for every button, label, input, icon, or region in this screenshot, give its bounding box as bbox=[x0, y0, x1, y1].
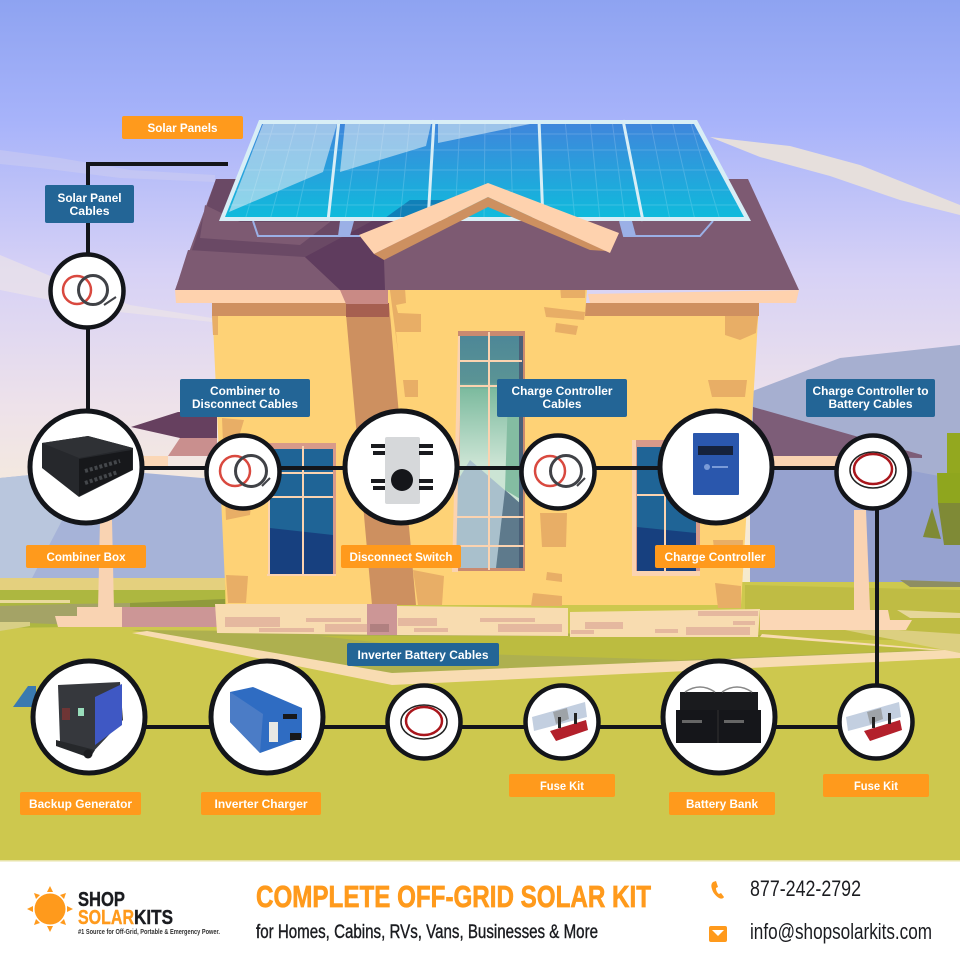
label: Battery Bank bbox=[669, 792, 775, 815]
label: Fuse Kit (right) bbox=[823, 774, 929, 797]
label: Combiner to Disconnect Cables: Disconnect Cables bbox=[192, 399, 298, 411]
right porch bbox=[753, 407, 922, 630]
label: Inverter Battery Cables: Inverter Battery Cables bbox=[358, 650, 488, 662]
phone number: 877-242-2792 bbox=[750, 876, 861, 901]
circle: fuse kit bbox=[526, 686, 598, 758]
left window bbox=[267, 443, 336, 576]
circle: battery bank bbox=[663, 661, 775, 773]
logo: Shop Solar Kits: SOLAR bbox=[78, 907, 134, 929]
circle: backup generator bbox=[33, 661, 145, 773]
label: Charge Controller to Battery Cables: Battery Cables bbox=[828, 399, 912, 411]
label: Charge Controller to Battery Cables: Charge Controller to bbox=[812, 386, 928, 398]
label: Combiner Box bbox=[26, 545, 146, 568]
tall centre window bbox=[452, 331, 525, 572]
circle: charge controller bbox=[660, 411, 772, 523]
connector lines bbox=[88, 164, 877, 727]
label: Disconnect Switch: Disconnect Switch bbox=[350, 552, 452, 564]
circle: inverter battery cables bbox=[388, 686, 460, 758]
label: Inverter Charger bbox=[201, 792, 321, 815]
label: Charge Controller Cables bbox=[497, 379, 627, 417]
label: Combiner to Disconnect Cables bbox=[180, 379, 310, 417]
label: Fuse Kit (right): Fuse Kit bbox=[854, 781, 898, 793]
label: Solar Panel Cables: Solar Panel bbox=[58, 193, 122, 205]
icon: email bbox=[709, 926, 727, 942]
house bbox=[55, 120, 922, 637]
foundation bbox=[215, 604, 760, 637]
label: Battery Bank: Battery Bank bbox=[686, 799, 759, 811]
label: Fuse Kit bbox=[509, 774, 615, 797]
label: Charge Controller bbox=[655, 545, 775, 568]
footer title: COMPLETE OFF-GRID SOLAR KIT bbox=[256, 879, 651, 914]
label: Inverter Battery Cables bbox=[347, 643, 499, 666]
logo: Shop Solar Kits bbox=[27, 886, 220, 936]
circle: inverter charger bbox=[211, 661, 323, 773]
gable bbox=[359, 183, 619, 260]
label: Solar Panel Cables: Cables bbox=[70, 206, 110, 218]
label: Backup Generator: Backup Generator bbox=[29, 799, 133, 811]
right window bbox=[632, 440, 700, 576]
icon: phone bbox=[711, 881, 724, 899]
label: Charge Controller Cables: Cables bbox=[542, 399, 582, 411]
label: Solar Panel Cables bbox=[45, 185, 134, 223]
circle: charge controller cables bbox=[522, 436, 594, 508]
circle: solar panel cables bbox=[50, 254, 124, 328]
circle: disconnect switch bbox=[345, 411, 457, 523]
roof bbox=[175, 179, 799, 304]
label: Solar Panels bbox=[122, 116, 243, 139]
label: Fuse Kit: Fuse Kit bbox=[540, 781, 584, 793]
logo: Shop Solar Kits: #1 Source for Off-Grid, Portable & Emergency Power. bbox=[78, 927, 220, 936]
label: Charge Controller to Battery Cables bbox=[806, 379, 935, 417]
circle: combiner box bbox=[30, 411, 142, 523]
logo: Shop Solar Kits: KITS bbox=[134, 907, 173, 929]
label: Backup Generator bbox=[20, 792, 141, 815]
solar panel array bbox=[219, 120, 751, 236]
label: Inverter Charger: Inverter Charger bbox=[214, 799, 308, 811]
label: Solar Panels: Solar Panels bbox=[148, 123, 218, 135]
left porch bbox=[55, 412, 217, 627]
label: Disconnect Switch bbox=[341, 545, 461, 568]
circle: charge controller to battery cables bbox=[836, 436, 910, 508]
footer band bbox=[0, 860, 960, 960]
label: Charge Controller Cables: Charge Controller bbox=[512, 386, 613, 398]
label: Combiner to Disconnect Cables: Combiner to bbox=[210, 386, 280, 398]
label: Combiner Box: Combiner Box bbox=[46, 552, 126, 564]
footer subtitle: for Homes, Cabins, RVs, Vans, Businesses & More bbox=[256, 922, 598, 943]
brick patches bbox=[212, 250, 758, 608]
logo: Shop Solar Kits: SHOP bbox=[78, 889, 125, 911]
circle: fuse kit (right) bbox=[840, 686, 912, 758]
circle: combiner to disconnect cables bbox=[206, 436, 280, 508]
label: Charge Controller: Charge Controller bbox=[664, 552, 766, 564]
walls bbox=[212, 207, 759, 608]
